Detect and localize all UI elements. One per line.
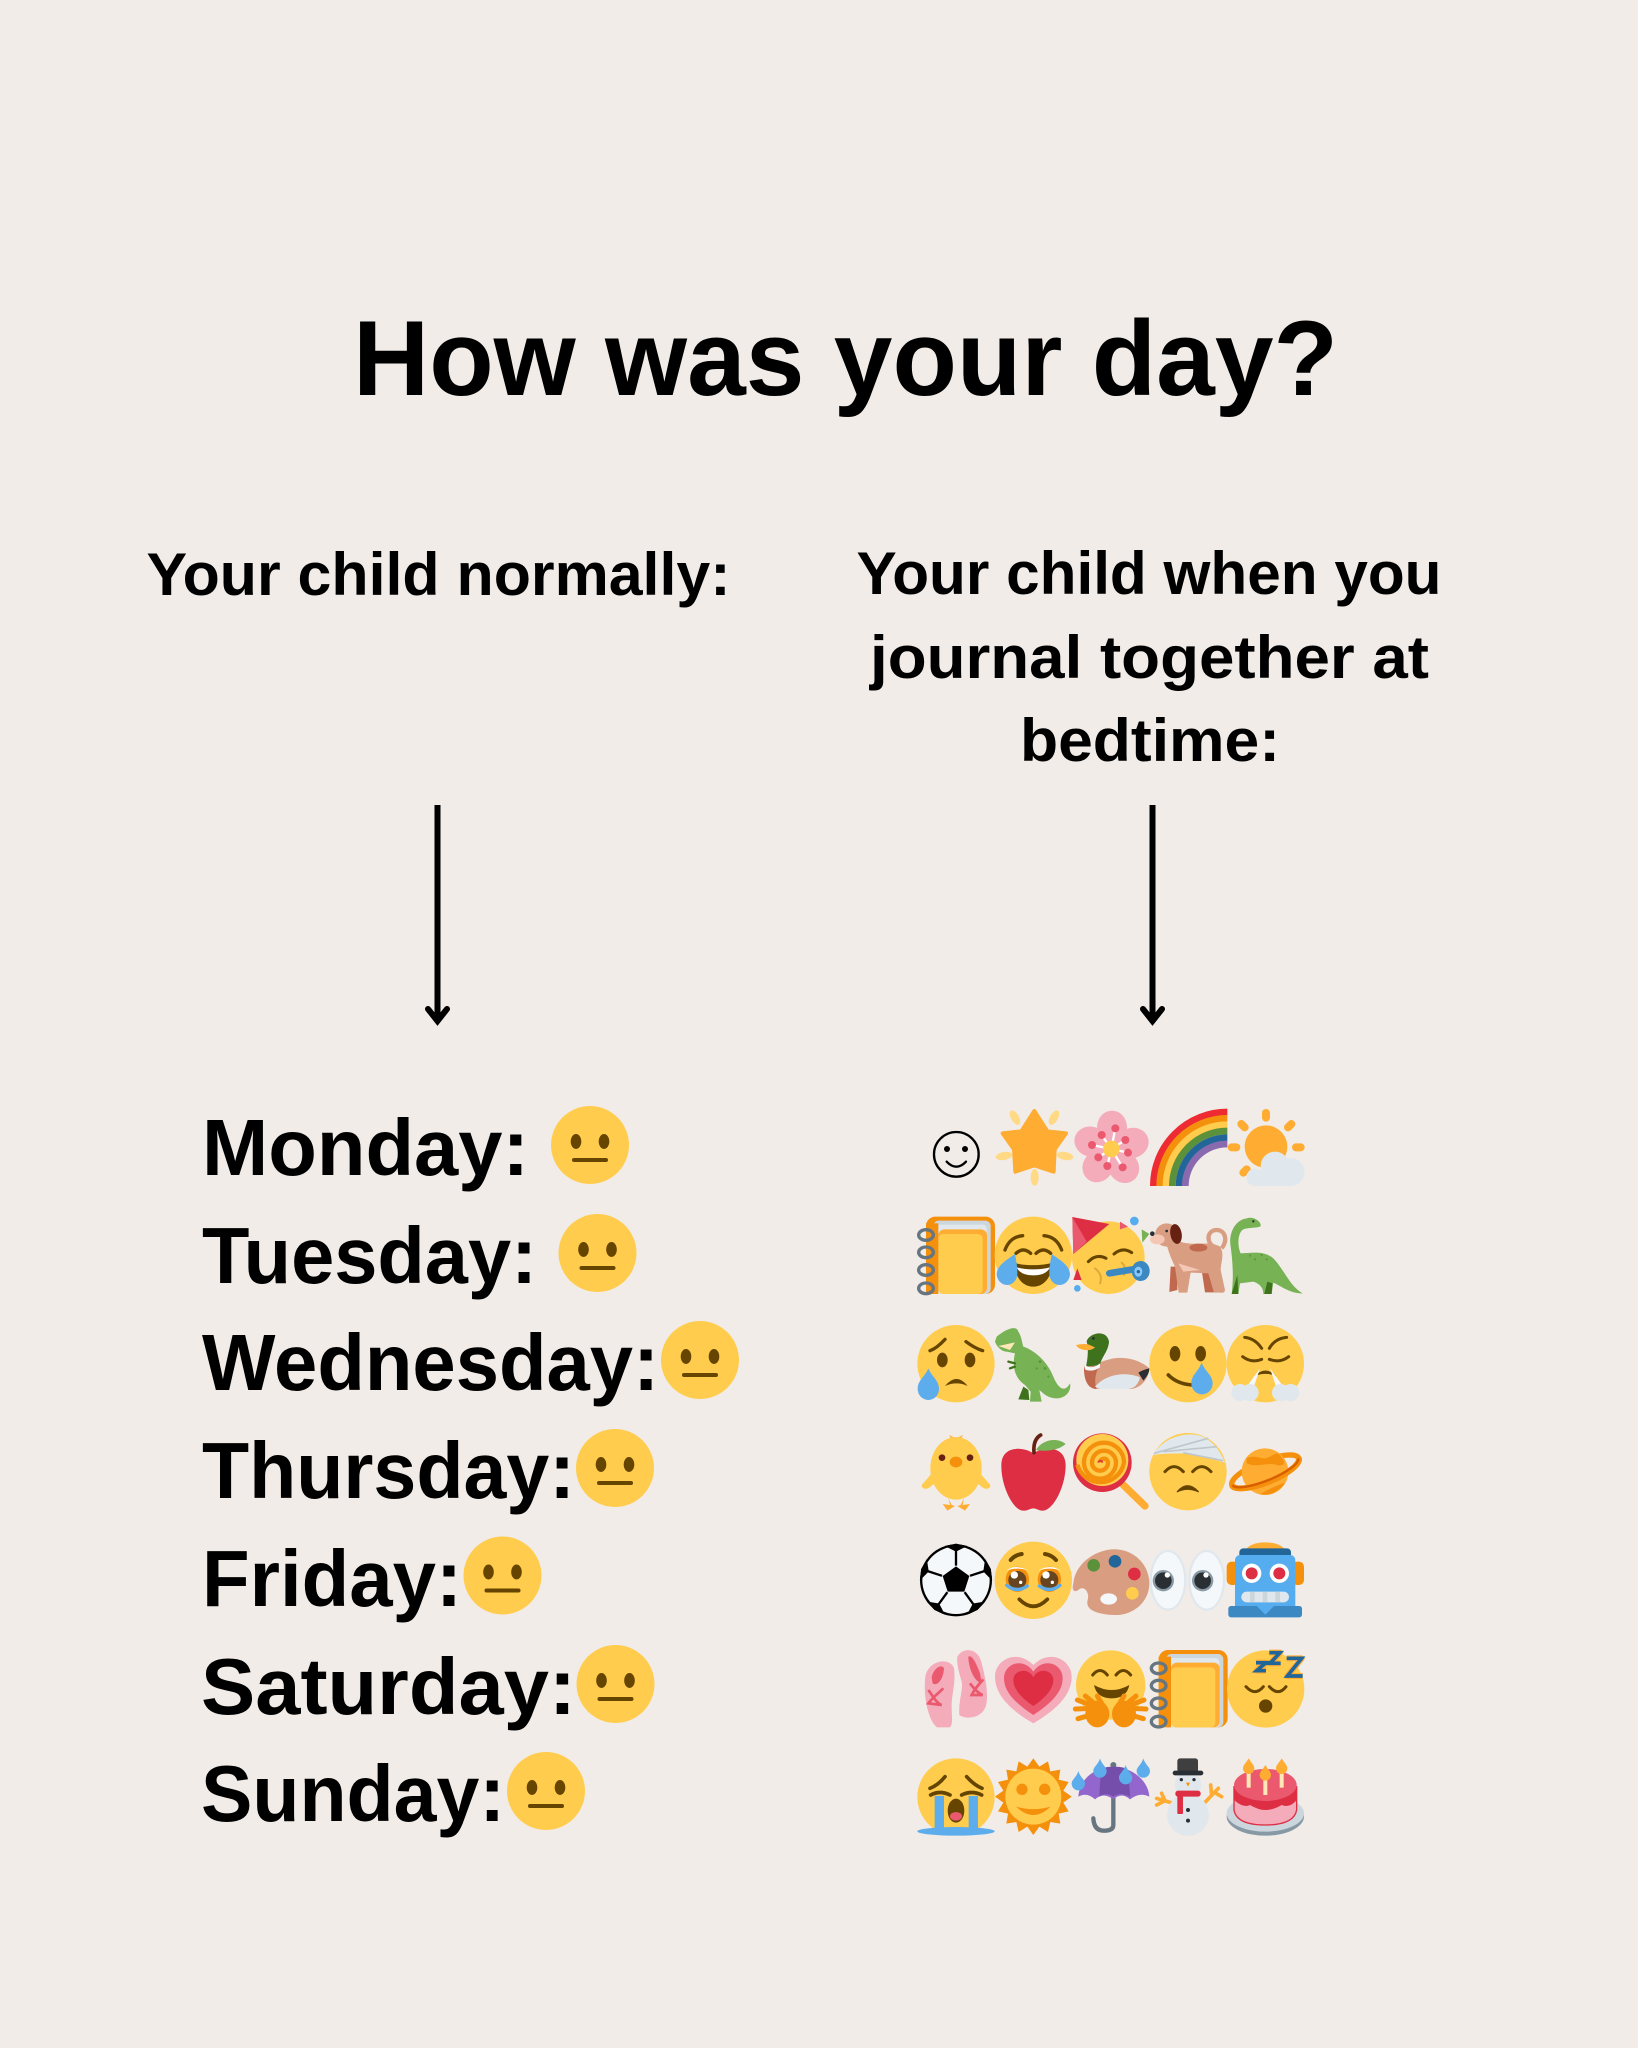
icon: face with head bandage (1149, 1433, 1227, 1510)
emoji row: Friday (918, 1542, 1304, 1619)
icon: smile outline (934, 1132, 979, 1177)
label: Wednesday: Wednesday: (202, 1318, 659, 1407)
label: Tuesday: Tuesday: (202, 1211, 537, 1300)
icon: smiling face with tear (1149, 1325, 1227, 1402)
icon: neutral face Friday (464, 1536, 542, 1614)
title: How was your day? (353, 298, 1338, 418)
icon: face with steam (1227, 1325, 1304, 1402)
icon: notebook (919, 1217, 995, 1294)
icon: neutral face Monday (551, 1106, 629, 1184)
label: Sunday: Sunday: (201, 1749, 505, 1838)
icon: face holding back tears (995, 1542, 1072, 1619)
icon: neutral face Tuesday (558, 1214, 636, 1292)
emoji row: Sunday (917, 1758, 1304, 1836)
icon: birthday cake (1227, 1758, 1304, 1836)
emoji row: Tuesday (919, 1217, 1303, 1294)
icon: robot (1227, 1542, 1304, 1617)
arrow: right column (1143, 805, 1162, 1021)
icon: growing heart (995, 1657, 1072, 1723)
heading: your child when you journal together at bedtime: bedtime: (1020, 707, 1280, 774)
icon: loudly crying face (917, 1758, 995, 1836)
label: Thursday: Thursday: (202, 1426, 575, 1515)
icon: soccer ball (918, 1544, 994, 1617)
label: Friday: Friday: (202, 1534, 462, 1623)
arrow: left column (428, 805, 447, 1021)
emoji row: Monday (934, 1109, 1305, 1189)
icon: neutral face Saturday (576, 1645, 654, 1723)
icon: duck (1076, 1333, 1149, 1389)
emoji row: Saturday (925, 1650, 1304, 1728)
heading: your child when you journal together at bedtime: journal together at (869, 624, 1429, 691)
icon: sun behind cloud (1228, 1109, 1305, 1186)
icon: hugging face (1075, 1650, 1146, 1727)
icon: t-rex (995, 1328, 1070, 1402)
icon: sad face with sweat drop (917, 1325, 995, 1402)
heading: your child normally: Your child normally: (146, 541, 730, 608)
icon: sun with face (995, 1758, 1072, 1835)
icon: glowing star (995, 1109, 1074, 1186)
icon: cherry blossom (1070, 1111, 1153, 1189)
icon: neutral face Thursday (576, 1429, 654, 1507)
heading: your child when you journal together at bedtime: Your child when you (856, 540, 1442, 607)
icon: ringed planet (1228, 1448, 1303, 1495)
icon: artist palette (1073, 1549, 1149, 1615)
icon: lollipop (1073, 1433, 1145, 1506)
icon: red apple (1001, 1435, 1066, 1511)
emoji row: Wednesday (917, 1325, 1304, 1402)
icon: neutral face Sunday (507, 1752, 585, 1830)
icon: neutral face Wednesday (661, 1321, 739, 1399)
heading: your child when you journal together at bedtime (856, 540, 1442, 774)
label: Monday: Monday: (202, 1103, 529, 1192)
icon: umbrella with rain (1072, 1758, 1150, 1831)
icon: chick (922, 1435, 990, 1511)
icon: dog (1150, 1223, 1225, 1293)
icon: ballet shoes (925, 1650, 987, 1727)
icon: eyes (1151, 1551, 1224, 1610)
label: Saturday: Saturday: (201, 1642, 576, 1731)
icon: snowman (1157, 1758, 1222, 1836)
icon: partying face (1072, 1217, 1150, 1294)
icon: notebook (1151, 1650, 1228, 1727)
icon: sleeping face (1227, 1650, 1304, 1728)
emoji row: Thursday (922, 1433, 1303, 1511)
icon: brontosaurus (1230, 1218, 1303, 1294)
icon: rainbow (1153, 1112, 1227, 1186)
icon: tears of joy (995, 1217, 1072, 1294)
